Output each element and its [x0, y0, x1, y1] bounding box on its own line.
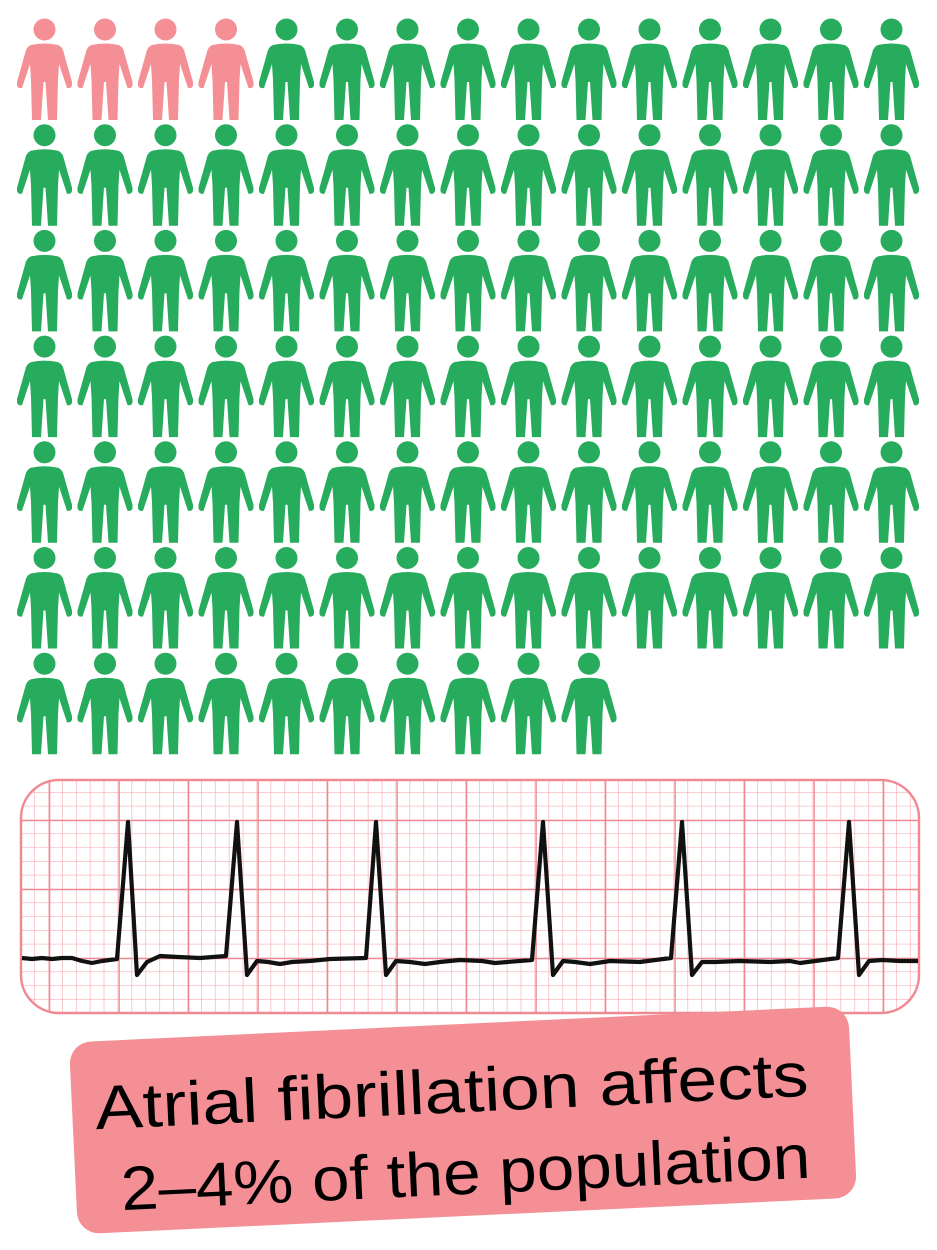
- ECG trace: [22, 822, 918, 975]
- callout: prevalence label: [69, 1006, 857, 1234]
- text: Atrial fibrillation affects 2–4% of the population: 2–4% of the population: [119, 1123, 812, 1224]
- green people: [17, 18, 919, 754]
- panel: ECG strip: [21, 780, 919, 1013]
- text: Atrial fibrillation affects 2–4% of the population: [93, 1041, 814, 1225]
- pink people (4 affected): [17, 18, 254, 120]
- text: Atrial fibrillation affects 2–4% of the population: Atrial fibrillation affects: [93, 1041, 810, 1143]
- people grid: [17, 18, 919, 754]
